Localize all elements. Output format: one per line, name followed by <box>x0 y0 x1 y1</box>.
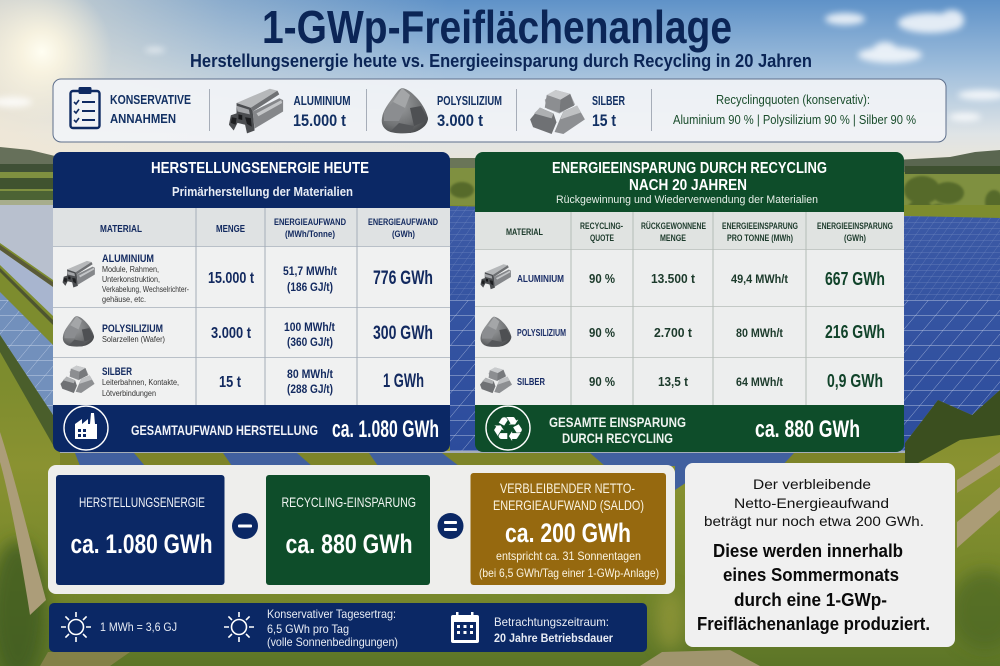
recycling rates: Recyclingquoten (konservativ): <box>716 93 870 107</box>
table header: RÜCKGEWONNENE <box>641 221 706 232</box>
note: daily yield: 6,5 GWh pro Tag <box>267 622 349 636</box>
row: polysilizium: 3.000 t <box>211 325 252 342</box>
total footer: GESAMTAUFWAND HERSTELLUNG <box>131 422 318 438</box>
total footer: ca. 1.080 GWh <box>332 416 439 443</box>
trees <box>450 176 1000 216</box>
polysilicon amount <box>437 93 502 130</box>
row: silber: SILBER <box>517 376 545 388</box>
heading: ENERGIEEINSPARUNG DURCH RECYCLING <box>552 160 827 177</box>
table header: MENGE <box>216 224 245 235</box>
row: polysilizium: POLYSILIZIUM <box>517 327 566 339</box>
table header: ENERGIEEINSPARUNG <box>817 221 893 232</box>
row: aluminium: 90 % <box>589 271 615 286</box>
row: silber: 13,5 t <box>658 374 689 389</box>
under-panel grass shadows <box>60 452 905 466</box>
conclusion statement: Freiflächenanlage produziert. <box>697 614 930 634</box>
icon: sun <box>61 612 91 642</box>
row: polysilizium: 90 % <box>589 325 615 340</box>
note: daily yield <box>267 607 398 649</box>
note: daily yield: Konservativer Tagesertrag: <box>267 607 396 621</box>
silver amount <box>592 93 625 130</box>
heading <box>552 160 827 206</box>
label: konservative annahmen: KONSERVATIVE <box>110 92 191 107</box>
row: aluminium: 49,4 MWh/t <box>731 272 788 286</box>
table header: PRO TONNE (MWh) <box>727 233 793 244</box>
table header: RECYCLING- <box>580 221 623 232</box>
icon: silver <box>530 90 585 134</box>
note: period <box>494 615 613 645</box>
silver amount: 15 t <box>592 111 616 130</box>
box: netto-energieaufwand: VERBLEIBENDER NETTO- <box>500 480 635 496</box>
aluminium amount <box>293 93 350 130</box>
grass ground <box>0 205 1000 666</box>
aluminium amount: ALUMINIUM <box>294 93 350 108</box>
polysilicon amount: POLYSILIZIUM <box>437 93 502 108</box>
row: aluminium: 667 GWh <box>825 269 885 289</box>
row: aluminium <box>63 253 433 304</box>
row: polysilizium: 216 GWh <box>825 322 885 342</box>
icon: recycling: ♻ <box>491 410 525 450</box>
table header: MATERIAL <box>100 224 142 235</box>
heading: HERSTELLUNGSENERGIE HEUTE <box>151 160 369 177</box>
row: polysilizium: 300 GWh <box>373 323 433 344</box>
row: polysilizium: 80 MWh/t <box>736 326 783 340</box>
shadow under right panels <box>905 390 1000 470</box>
note: daily yield: (volle Sonnenbedingungen) <box>267 635 398 649</box>
row: aluminium: 13.500 t <box>651 271 696 286</box>
table header: ENERGIEAUFWAND <box>274 217 346 228</box>
title: 1-GWp-Freiflächenanlage <box>262 1 732 53</box>
row: aluminium: 776 GWh <box>373 268 433 289</box>
icon: clipboard <box>70 88 100 128</box>
icon: aluminium <box>229 89 283 133</box>
row: silber <box>60 366 424 398</box>
box: netto-energieaufwand: ENERGIEAUFWAND (SALDO) <box>493 497 644 513</box>
table header: QUOTE <box>590 233 614 244</box>
panel: energy balance equation <box>48 465 675 594</box>
row: polysilizium <box>480 317 885 347</box>
table header <box>100 217 438 240</box>
row: aluminium: Verkabelung, Wechselrichter- <box>102 285 189 294</box>
table header <box>506 221 893 244</box>
row: aluminium: 15.000 t <box>208 270 255 287</box>
far land and hills <box>0 168 1000 220</box>
note: period: Betrachtungszeitraum: <box>494 615 609 629</box>
table header: ENERGIEEINSPARUNG <box>722 221 798 232</box>
total footer: ca. 880 GWh <box>755 416 860 443</box>
recycling rates: Aluminium 90 % | Polysilizium 90 % | Silber 90 % <box>673 113 916 127</box>
polysilicon amount: 3.000 t <box>437 111 483 130</box>
box: netto-energieaufwand: (bei 6,5 GWh/Tag einer 1-GWp-Anlage) <box>479 566 659 580</box>
left solar rows <box>0 205 53 280</box>
icon: sun yield <box>224 612 254 642</box>
box: recycling-einsparung: ca. 880 GWh <box>286 529 412 559</box>
conclusion statement: durch eine 1-GWp- <box>734 590 887 610</box>
box: herstellungsenergie: ca. 1.080 GWh <box>70 529 212 559</box>
panel: conclusion <box>685 463 955 647</box>
row: aluminium: ALUMINIUM <box>517 273 564 285</box>
total footer: GESAMTE EINSPARUNG <box>549 414 686 430</box>
conclusion intro: Der verbleibende <box>753 476 871 492</box>
clouds <box>0 10 1000 121</box>
row: silber: 90 % <box>589 374 615 389</box>
silver amount: SILBER <box>592 93 625 108</box>
row: silber: 80 MWh/t <box>287 367 333 381</box>
row: aluminium <box>481 264 885 289</box>
note: conversion: 1 MWh = 3,6 GJ <box>100 622 177 634</box>
row: silber: SILBER <box>102 366 132 378</box>
row: silber: 64 MWh/t <box>736 375 783 389</box>
table <box>53 208 450 405</box>
row: silber <box>480 367 883 393</box>
row: polysilizium: 100 MWh/t <box>284 320 335 334</box>
row: polysilizium: Solarzellen (Wafer) <box>102 335 165 344</box>
row: polysilizium: (360 GJ/t) <box>287 335 333 349</box>
box: herstellungsenergie <box>56 475 224 585</box>
conclusion intro <box>704 476 924 529</box>
table header: (GWh) <box>392 229 415 240</box>
conclusion statement <box>697 541 930 634</box>
icon: polysilicon <box>382 88 428 133</box>
panel: notes bar <box>49 603 647 652</box>
box: netto-energieaufwand: entspricht ca. 31 Sonnentagen <box>496 549 641 563</box>
box: herstellungsenergie: HERSTELLUNGSENERGIE <box>79 494 205 510</box>
dirt paths <box>0 432 46 615</box>
row: aluminium: (186 GJ/t) <box>287 280 333 294</box>
note: period: 20 Jahre Betriebsdauer <box>494 631 613 645</box>
total footer <box>486 406 860 450</box>
panel: assumptions <box>53 79 946 142</box>
heading: Rückgewinnung und Wiederverwendung der Materialien <box>556 194 818 206</box>
total footer: DURCH RECYCLING <box>562 430 673 446</box>
table header: MATERIAL <box>506 227 543 238</box>
row: aluminium: gehäuse, etc. <box>102 295 146 304</box>
conclusion statement: Diese werden innerhalb <box>713 541 903 561</box>
main solar field <box>450 206 1000 455</box>
panel: energieeinsparung durch recycling <box>475 152 904 452</box>
grass shading <box>0 540 1000 666</box>
subtitle: Herstellungsenergie heute vs. Energieeinsparung durch Recycling in 20 Jahren <box>190 50 812 71</box>
row: polysilizium <box>63 316 433 349</box>
table header: (MWh/Tonne) <box>285 229 335 240</box>
table header: ENERGIEAUFWAND <box>368 217 438 228</box>
table header: (GWh) <box>844 233 866 244</box>
box: recycling-einsparung <box>266 475 430 585</box>
row: silber: (288 GJ/t) <box>287 382 333 396</box>
conclusion statement: eines Sommermonats <box>723 565 899 585</box>
heading: NACH 20 JAHREN <box>629 177 747 194</box>
sky <box>0 0 1000 172</box>
box: netto-energieaufwand <box>470 473 666 585</box>
row: aluminium: ALUMINIUM <box>102 253 154 265</box>
conclusion intro: Netto-Energieaufwand <box>734 495 889 511</box>
recycling rates <box>673 93 916 127</box>
conclusion intro: beträgt nur noch etwa 200 GWh. <box>704 513 924 529</box>
aluminium amount: 15.000 t <box>293 111 346 130</box>
total footer <box>64 406 439 450</box>
row: silber: Lötverbindungen <box>102 389 156 398</box>
label: konservative annahmen: ANNAHMEN <box>110 111 176 126</box>
row: silber: 0,9 GWh <box>827 371 883 391</box>
box: recycling-einsparung: RECYCLING-EINSPARUNG <box>282 494 416 510</box>
heading <box>151 160 369 199</box>
label: konservative annahmen <box>110 92 191 126</box>
icon: factory <box>75 413 97 439</box>
row: silber: Leiterbahnen, Kontakte, <box>102 378 179 387</box>
warm light near the sun <box>0 0 450 172</box>
row: aluminium: 51,7 MWh/t <box>283 264 337 278</box>
row: polysilizium: POLYSILIZIUM <box>102 323 163 335</box>
sun glow <box>0 0 120 125</box>
table header: MENGE <box>660 233 686 244</box>
icon: calendar <box>451 612 479 643</box>
operator: equals <box>438 513 464 539</box>
panel: herstellungsenergie heute <box>53 152 450 452</box>
heading: Primärherstellung der Materialien <box>172 184 353 199</box>
row: silber: 1 GWh <box>383 371 424 392</box>
table <box>475 212 904 405</box>
operator: minus <box>232 513 258 539</box>
box: netto-energieaufwand: ca. 200 GWh <box>505 518 631 548</box>
lower solar strips <box>75 453 794 490</box>
row: silber: 15 t <box>219 374 242 391</box>
row: aluminium: Unterkonstruktion, <box>102 275 160 284</box>
row: aluminium: Module, Rahmen, <box>102 265 159 274</box>
row: polysilizium: 2.700 t <box>654 325 693 340</box>
